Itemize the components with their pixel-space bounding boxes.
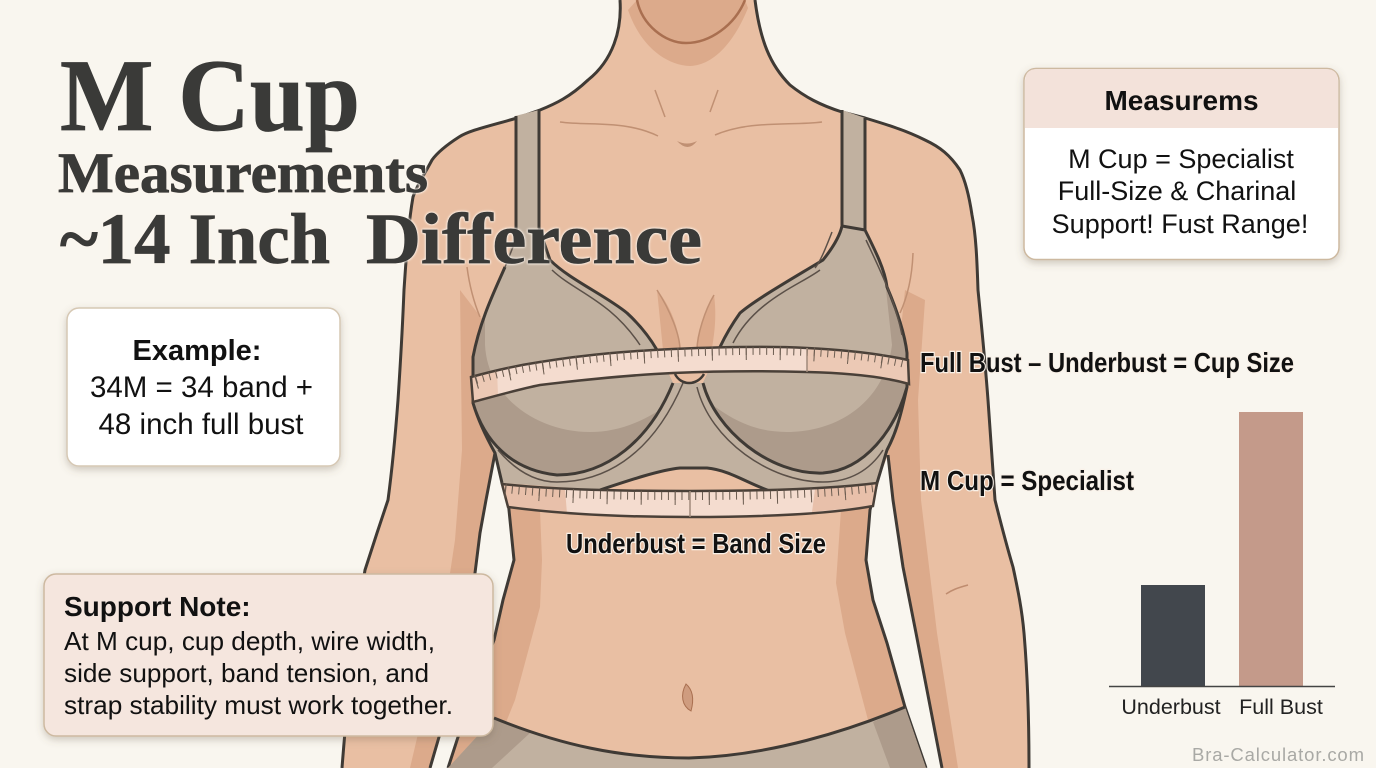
title line: Measurements: Measurements	[58, 142, 428, 205]
left cup shade	[474, 230, 673, 474]
panel body text	[1052, 144, 1308, 239]
support note heading: Support Note:	[64, 591, 251, 622]
support note text: At M cup, cup depth, wire width,	[64, 626, 435, 656]
label: full bust formula: Full Bust – Underbust = Cup Size	[920, 347, 1294, 378]
title line: M Cup: M Cup	[60, 39, 360, 153]
sternal notch	[677, 141, 697, 147]
neck and collarbone creases	[467, 90, 913, 350]
centre bridge	[675, 372, 704, 383]
panel body text: M Cup = Specialist	[1068, 144, 1294, 174]
bra outlines	[473, 226, 907, 492]
body skin silhouette	[342, 0, 1029, 768]
support note text: side support, band tension, and	[64, 658, 429, 688]
panel heading: Measurems	[1104, 85, 1259, 116]
arm crease	[946, 585, 968, 594]
panel body text: Support! Fust Range!	[1052, 209, 1308, 239]
panel header	[1025, 69, 1338, 128]
bar labels: Underbust	[1121, 695, 1221, 719]
bra body	[472, 224, 908, 489]
example text	[90, 371, 313, 441]
label: M cup specialist: M Cup = Specialist	[920, 465, 1134, 496]
panel body text: Full-Size & Charinal	[1058, 176, 1296, 206]
title line: inch difference	[60, 199, 702, 279]
chin line	[637, 0, 745, 43]
body outlines	[342, 0, 1029, 768]
example text: 48 inch full bust	[98, 408, 304, 441]
bra straps	[515, 110, 865, 232]
example text: 34M = 34 band +	[90, 371, 313, 404]
arm and torso shading	[410, 290, 958, 768]
tape: full bust	[471, 347, 909, 402]
right cup shade	[703, 289, 906, 472]
panel: example	[67, 308, 340, 466]
neck shadow	[628, 0, 748, 66]
bar: underbust	[1141, 585, 1205, 686]
bar labels	[1121, 695, 1323, 719]
cleavage shadow	[657, 290, 715, 350]
illustration: torso figure	[342, 0, 1029, 768]
navel	[683, 684, 693, 711]
bar labels: Full Bust	[1239, 695, 1323, 719]
label: underbust band size: Underbust = Band Size	[566, 528, 826, 559]
gaps between arms and torso	[430, 453, 514, 768]
watermark: Bra-Calculator.com	[1192, 744, 1364, 765]
support note text: strap stability must work together.	[64, 690, 453, 720]
bar chart	[1109, 412, 1335, 719]
tape: underbust	[502, 483, 877, 517]
underwear	[448, 707, 926, 768]
panel: Measurems	[1024, 68, 1339, 260]
support note text	[64, 626, 453, 720]
title line: inch difference: ~14 Inch	[60, 199, 330, 279]
bar: full bust	[1239, 412, 1303, 686]
title	[58, 39, 702, 279]
example heading: Example:	[133, 335, 261, 367]
title line: inch difference: Difference	[366, 199, 702, 279]
panel: support note	[44, 574, 493, 736]
